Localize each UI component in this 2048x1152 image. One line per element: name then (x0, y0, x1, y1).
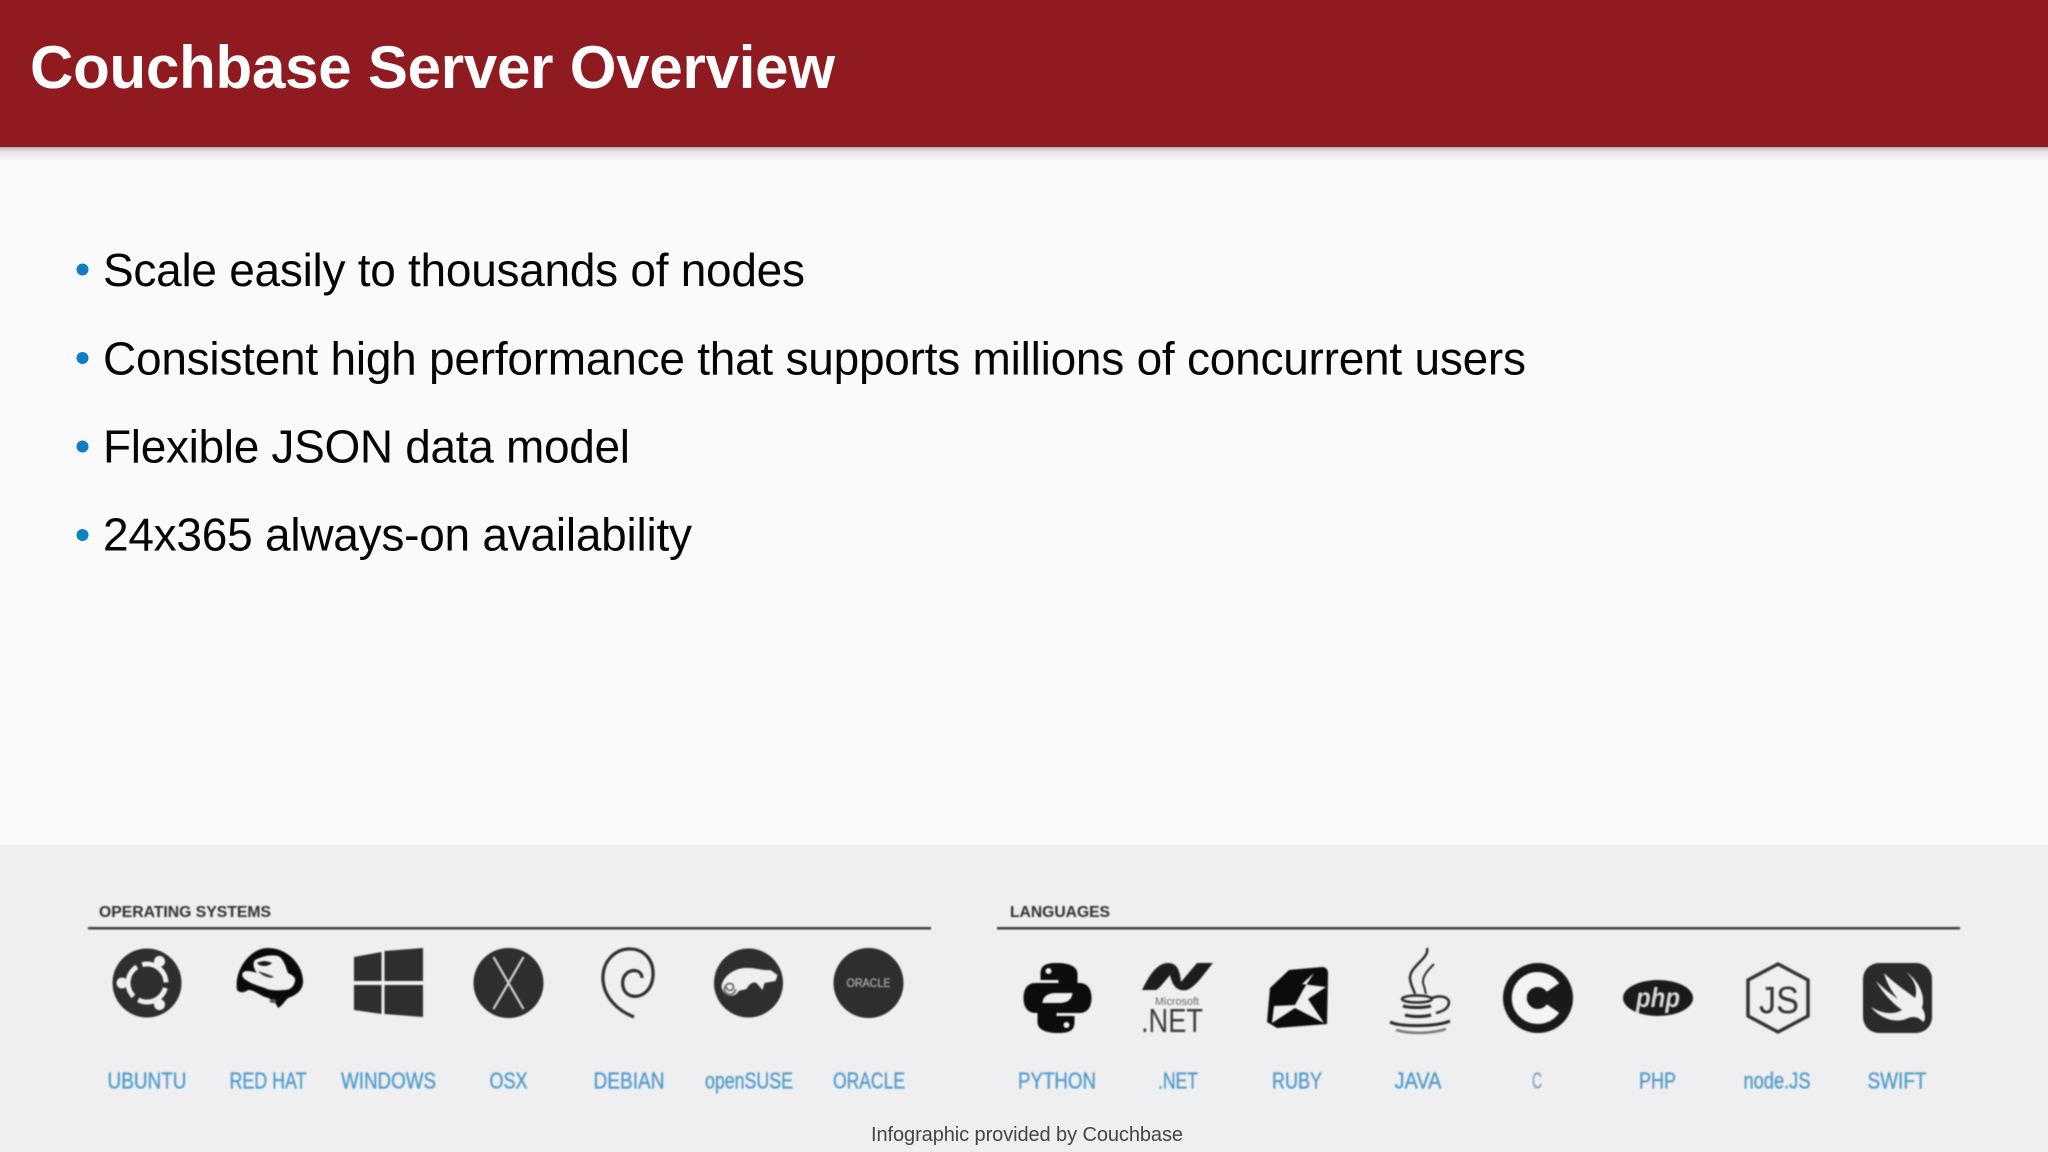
bullet: scale: Scale easily to thousands of nodes (103, 244, 805, 296)
labels: operating systems: ORACLE (833, 1068, 905, 1094)
labels: operating systems: RED HAT (230, 1068, 306, 1094)
icon: .net (1141, 963, 1213, 1039)
labels: languages: RUBY (1272, 1068, 1322, 1094)
languages section (997, 904, 1960, 1094)
bullet list (76, 244, 1526, 560)
labels: operating systems: UBUNTU (108, 1068, 186, 1094)
bullet: availability: 24x365 always-on availability (103, 508, 692, 560)
labels: languages: PHP (1639, 1068, 1676, 1094)
labels: languages: JAVA (1394, 1068, 1442, 1094)
icon: php (1623, 980, 1693, 1016)
icon: oracle (834, 948, 904, 1018)
header shadow (0, 146, 2048, 161)
labels: operating systems: OSX (490, 1068, 528, 1094)
labels: operating systems: DEBIAN (594, 1068, 664, 1094)
labels: languages: SWIFT (1868, 1068, 1926, 1094)
labels: languages: .NET (1158, 1068, 1198, 1094)
footer credit: Infographic provided by Couchbase (871, 1124, 1183, 1146)
labels: operating systems: openSUSE (705, 1068, 793, 1094)
icon: windows (354, 948, 423, 1017)
icon: osx (474, 948, 544, 1018)
labels: languages (1018, 1068, 1926, 1094)
icon: php: php (1635, 982, 1680, 1013)
icon: c (1503, 963, 1573, 1033)
icon: debian (603, 949, 653, 1017)
labels: languages: node.JS (1744, 1068, 1810, 1094)
icon: oracle: ORACLE (846, 976, 890, 990)
icon: .net: .NET (1141, 1002, 1203, 1039)
icon: red hat (237, 948, 303, 1008)
labels: operating systems: WINDOWS (341, 1068, 436, 1094)
labels: languages: C (1532, 1068, 1542, 1094)
bullet: data model: Flexible JSON data model (103, 420, 630, 472)
icon: opensuse (714, 948, 783, 1018)
icon: nodejs: JS (1759, 980, 1799, 1022)
icon: ubuntu (112, 948, 182, 1018)
title: Couchbase Server Overview (30, 34, 835, 101)
labels: languages: PYTHON (1018, 1068, 1096, 1094)
labels: operating systems (108, 1068, 905, 1094)
icon: ruby (1267, 967, 1328, 1028)
heading: languages: LANGUAGES (1010, 904, 1110, 921)
header band (0, 0, 2048, 147)
icon: swift (1863, 963, 1932, 1033)
icon: .net: Microsoft (1155, 996, 1199, 1008)
icon: java (1390, 948, 1450, 1033)
heading: operating systems: OPERATING SYSTEMS (99, 904, 271, 921)
bullet: performance: Consistent high performance that supports millions of concurrent users (103, 332, 1526, 384)
icon: nodejs (1748, 964, 1808, 1032)
operating systems section (88, 904, 931, 1094)
bottom panel (0, 845, 2048, 1152)
icon: python (1024, 963, 1092, 1033)
